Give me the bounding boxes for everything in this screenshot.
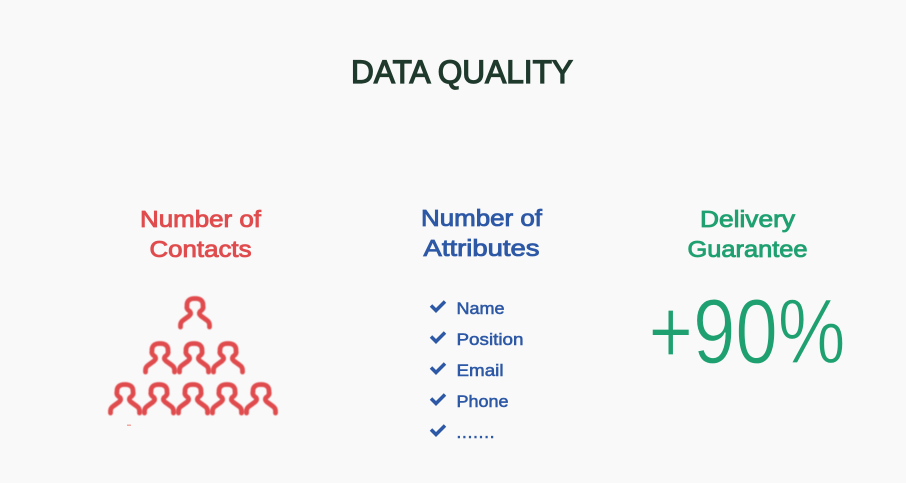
title: DATA QUALITY (351, 54, 573, 90)
heading: number of attributes: Number of (421, 205, 543, 231)
heading: number of contacts: Number of (140, 206, 262, 232)
checklist of attributes: Position (456, 330, 524, 349)
checklist of attributes: Email (456, 361, 504, 380)
heading: delivery guarantee (688, 206, 808, 262)
panel: number of attributes (421, 205, 543, 442)
checklist of attributes: Phone (456, 392, 508, 411)
heading: number of attributes: Attributes (424, 235, 540, 261)
heading: number of contacts (140, 206, 262, 262)
panel: delivery guarantee (648, 206, 846, 383)
checklist of attributes (431, 299, 524, 442)
checklist of attributes: Name (456, 299, 504, 318)
heading: number of contacts: Contacts (150, 236, 252, 262)
checklist of attributes: ....... (456, 423, 494, 442)
panel: number of contacts (110, 206, 276, 426)
stray pink mark (127, 424, 131, 426)
heading: delivery guarantee: Guarantee (688, 236, 808, 262)
icon: pyramid of people (110, 298, 276, 413)
heading: delivery guarantee: Delivery (700, 206, 796, 232)
heading: number of attributes (421, 205, 543, 261)
big number: +90%: +90% (648, 281, 846, 383)
